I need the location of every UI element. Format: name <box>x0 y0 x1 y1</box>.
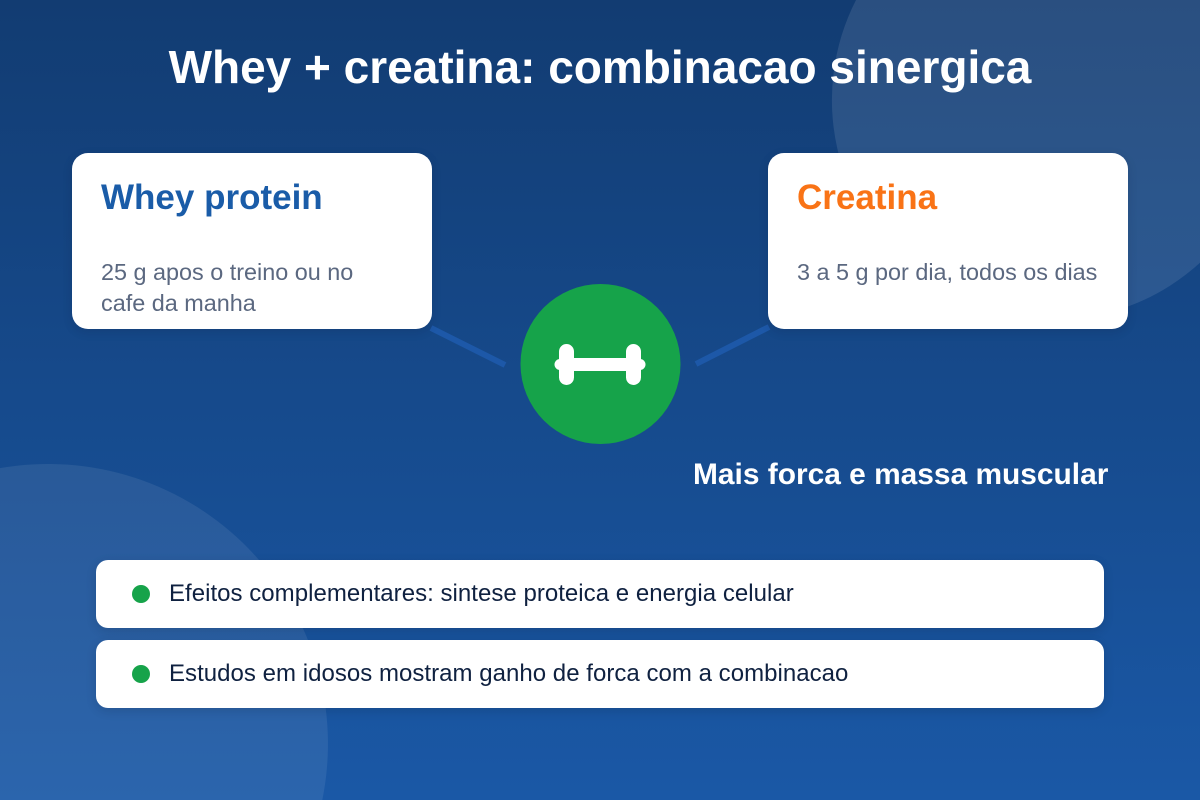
icon: dumbbell in green circle <box>520 284 680 444</box>
text: estudos: Estudos em idosos mostram ganho de forca com a combinacao <box>169 660 848 687</box>
bullet <box>132 665 150 683</box>
text: creatina dosage: 3 a 5 g por dia, todos os dias <box>797 259 1097 285</box>
text: whey dosage: cafe da manha <box>101 290 256 316</box>
text: whey dosage <box>101 259 353 316</box>
title: Whey + creatina: combinacao sinergica <box>169 41 1031 93</box>
result label: Mais forca e massa muscular <box>693 458 1108 491</box>
panel: creatina <box>768 153 1128 329</box>
heading: creatina: Creatina <box>797 178 937 217</box>
text: whey dosage: 25 g apos o treino ou no <box>101 259 353 285</box>
panel: whey protein <box>72 153 432 329</box>
heading: whey protein: Whey protein <box>101 178 323 217</box>
bullet <box>132 585 150 603</box>
list item: efeitos complementares <box>96 560 1104 628</box>
list item: estudos em idosos <box>96 640 1104 708</box>
text: efeitos: Efeitos complementares: sintese proteica e energia celular <box>169 580 794 607</box>
